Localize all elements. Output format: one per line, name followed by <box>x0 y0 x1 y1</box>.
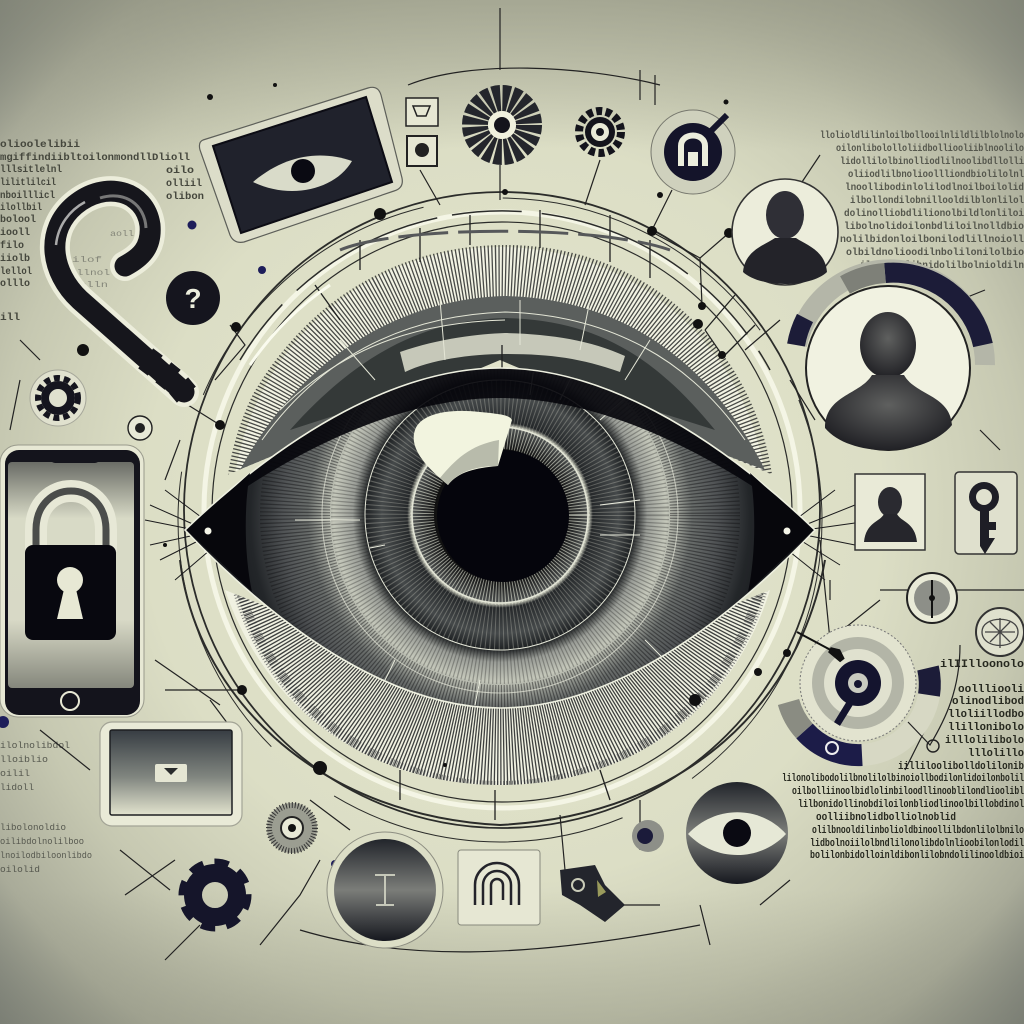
pseudo-code text block: lower left: oilil <box>0 769 30 779</box>
lower lid band <box>225 590 770 785</box>
upper lid shadow <box>185 368 815 530</box>
card: key <box>955 472 1017 554</box>
main eye illustration <box>145 192 862 842</box>
pseudo-code text block: upper left: bolool <box>0 214 36 226</box>
pseudo-code text block: upper left: mgiffindiibltoilonmondllDlioll <box>0 152 190 164</box>
pseudo-code text block: upper left: oilo <box>166 165 194 177</box>
pseudo-code text block: upper left: lllsitlelnl <box>0 164 62 176</box>
pseudo-code text block: lower left: libolonoldio <box>0 823 66 833</box>
icon: small eye <box>632 820 664 852</box>
pseudo-code text block: lower right <box>782 659 1024 862</box>
icon: padlock <box>25 491 116 640</box>
faint text inside the hook: illnol <box>70 269 110 278</box>
pseudo-code text block: lower right: olinodlibod <box>952 696 1024 708</box>
icon: small squares <box>406 98 438 166</box>
faint text inside the hook: iolln <box>72 281 108 290</box>
pseudo-code text block: lower left: ilolnolibdol <box>0 741 70 751</box>
eye almond <box>184 367 816 709</box>
pseudo-code text block: upper left: iiolb <box>0 253 30 265</box>
outer concentric rings <box>178 192 825 842</box>
pseudo-code text block: upper left: lellol <box>0 266 32 278</box>
circuit nodes <box>0 83 823 868</box>
pseudo-code text block: upper left: olliil <box>166 178 202 190</box>
icon: person circle <box>732 179 838 285</box>
pseudo-code text block: upper left: ilollbil <box>0 202 42 214</box>
icon: brain circle <box>976 608 1024 656</box>
pseudo-code text block: upper left: olibon <box>166 191 204 203</box>
pseudo-code text block: lower left: oilolid <box>0 865 40 875</box>
pseudo-code text block: upper left: ill <box>0 312 20 324</box>
card: monitor <box>100 722 242 826</box>
faint text inside the hook: ilof <box>72 256 102 265</box>
pupil <box>437 450 569 582</box>
icon: sunburst <box>475 98 529 152</box>
icon: question mark: ? <box>184 283 202 314</box>
card: eye <box>199 87 402 242</box>
right corner <box>748 473 813 592</box>
pseudo-code text block: lower right: oolliibnolidbolliolnoblid <box>816 812 956 824</box>
lid edge highlight <box>185 368 815 708</box>
pseudo-code text block: lower left: lloiblio <box>0 755 48 765</box>
icon: small target <box>128 416 152 440</box>
card: person <box>855 474 925 550</box>
pseudo-code text block: lower left: lidoll <box>0 783 34 793</box>
left corner <box>187 473 252 592</box>
icon: fingerprint <box>458 850 540 925</box>
key / hook <box>55 191 192 398</box>
icon: dark disc <box>327 832 443 948</box>
icon: small dial <box>907 573 957 623</box>
lid tick marks <box>250 210 755 820</box>
icon: dark cube <box>560 865 625 922</box>
pseudo-code text block: lower left <box>0 741 92 875</box>
iris hatching <box>422 437 578 593</box>
faint text inside the hook <box>70 230 140 290</box>
highlight <box>414 411 512 485</box>
pseudo-code text block: upper right <box>820 130 1024 272</box>
icon: lens lock with ring segments <box>788 625 960 755</box>
pseudo-code text block: upper left: filo <box>0 240 24 252</box>
icon: gear bottom <box>183 863 247 927</box>
pseudo-code text block: upper left: lilitlilcil <box>0 177 56 189</box>
pseudo-code text block: upper left <box>0 139 204 324</box>
pseudo-code text block: lower left: oilibdolnolilboo <box>0 837 84 847</box>
icon: large person with ring <box>796 269 985 450</box>
upper lid band <box>228 245 772 474</box>
pseudo-code text block: lower right: oollliooli <box>958 684 1024 696</box>
phone <box>0 445 144 717</box>
icon: target bottom <box>267 803 317 853</box>
lashes <box>145 490 862 580</box>
pseudo-code text block: upper left: nboilllicl <box>0 190 55 202</box>
pseudo-code text block: upper left: olioolelibii <box>0 139 80 151</box>
icon: lock circle <box>651 110 735 194</box>
pseudo-code text block: upper left: iooll <box>0 227 30 239</box>
faint text inside the hook: aolli <box>110 230 140 239</box>
icon: gear left <box>30 370 86 426</box>
pseudo-code text block: lower left: lnoilodbiloonlibdo <box>0 851 92 861</box>
pseudo-code text block: lower right: ilIIlloonolo <box>940 659 1024 671</box>
icon: eye disc <box>686 782 788 884</box>
icon: question mark <box>166 271 220 325</box>
icon: gear top <box>579 111 621 153</box>
pseudo-code text block: upper left: olllo <box>0 278 30 290</box>
